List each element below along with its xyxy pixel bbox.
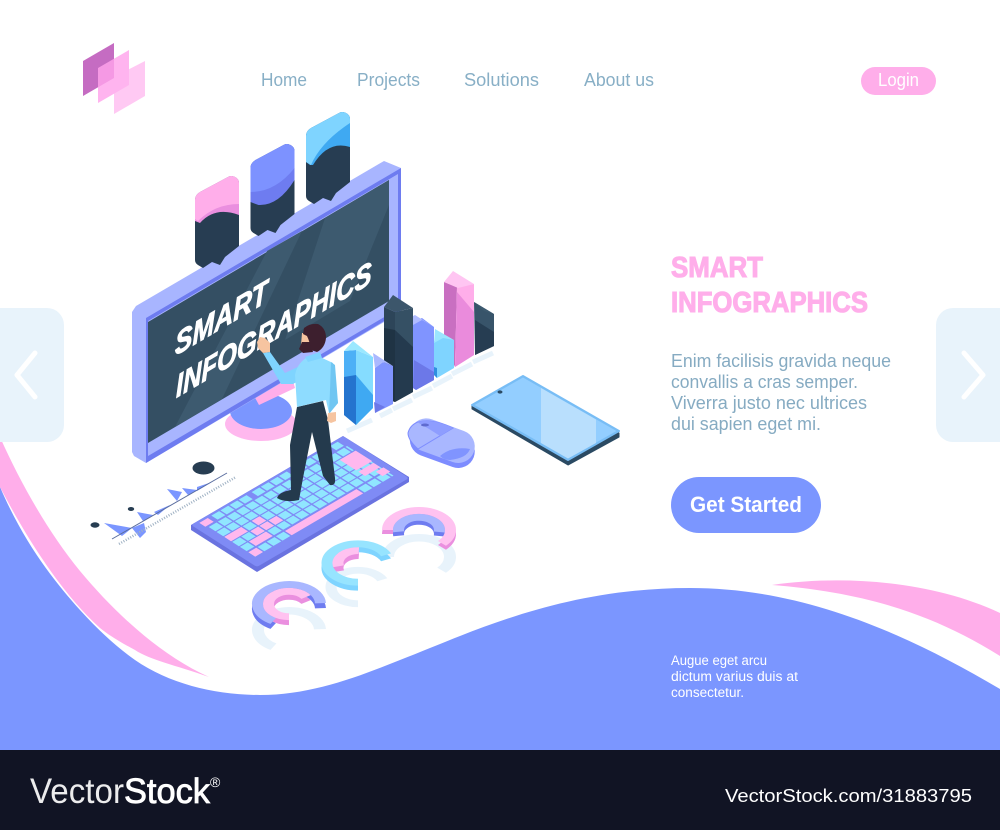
bar lavender mid bbox=[413, 315, 434, 390]
speech bubble blue bbox=[306, 112, 350, 204]
speech bubble pink bbox=[195, 176, 239, 268]
login button bbox=[861, 67, 936, 95]
mouse bbox=[405, 414, 479, 473]
navigation: Solutions bbox=[464, 70, 539, 90]
face bbox=[301, 333, 310, 345]
get started button: Get Started bbox=[690, 492, 802, 517]
pink swoosh right bbox=[772, 580, 1000, 656]
navigation bbox=[261, 70, 654, 90]
man bbox=[257, 324, 338, 501]
tablet bbox=[472, 376, 619, 465]
bar light blue bbox=[434, 329, 454, 378]
trousers bbox=[277, 401, 335, 501]
body text: convallis a cras semper. bbox=[671, 372, 858, 392]
navigation: Projects bbox=[357, 70, 420, 90]
watermark footer: VectorStock.com/31883795 bbox=[725, 785, 972, 806]
keyboard pink keys bbox=[199, 440, 395, 557]
heading: INFOGRAPHICS bbox=[671, 287, 868, 319]
left arrow panel bbox=[0, 308, 64, 442]
monitor bbox=[132, 161, 401, 463]
beard bbox=[299, 342, 313, 353]
login button: Login bbox=[878, 70, 919, 90]
right arm shade bbox=[329, 362, 338, 414]
navigation: About us bbox=[584, 70, 654, 90]
watermark footer bbox=[0, 750, 1000, 830]
bar blue bbox=[344, 341, 373, 425]
heading: SMART bbox=[671, 252, 763, 284]
small caption: consectetur. bbox=[671, 685, 744, 700]
small caption bbox=[671, 653, 798, 700]
bar dark tall bbox=[384, 295, 413, 402]
bar chart bbox=[344, 271, 494, 431]
bar pink bbox=[444, 271, 474, 367]
blue wave background bbox=[0, 487, 1000, 750]
donut middle bbox=[327, 544, 389, 604]
keyboard bbox=[191, 436, 409, 572]
right arrow panel bbox=[936, 308, 1000, 442]
bar lavender short bbox=[373, 353, 393, 413]
navigation: Home bbox=[261, 70, 307, 90]
watermark footer: ® bbox=[210, 774, 221, 790]
monitor stand bbox=[225, 377, 297, 441]
logo bbox=[83, 43, 145, 114]
heading bbox=[671, 252, 868, 319]
keyboard keys bbox=[204, 443, 390, 554]
body text: Viverra justo nec ultrices bbox=[671, 393, 867, 413]
body text: dui sapien eget mi. bbox=[671, 414, 821, 434]
monitor headline: SMART bbox=[175, 271, 270, 363]
donut right bbox=[388, 510, 450, 576]
get started button bbox=[671, 477, 821, 533]
body text bbox=[671, 351, 891, 434]
hair bbox=[303, 324, 326, 352]
donut left bbox=[246, 577, 332, 656]
pink swoosh left bbox=[0, 437, 209, 677]
watermark footer: Vector bbox=[30, 772, 124, 811]
chart line with peaks bbox=[90, 462, 236, 544]
body text: Enim facilisis gravida neque bbox=[671, 351, 891, 371]
torso bbox=[295, 357, 338, 413]
watermark footer: Stock bbox=[124, 772, 210, 811]
monitor screen bbox=[148, 180, 389, 443]
speech bubble lavender bbox=[250, 144, 294, 236]
small caption: Augue eget arcu bbox=[671, 653, 767, 668]
right hand bbox=[327, 412, 336, 423]
collar bbox=[305, 352, 322, 362]
monitor headline: INFOGRAPHICS bbox=[176, 254, 372, 405]
left arm bbox=[263, 352, 304, 384]
bar dark short bbox=[474, 302, 494, 355]
hand bbox=[257, 337, 270, 353]
small caption: dictum varius duis at bbox=[671, 669, 798, 684]
